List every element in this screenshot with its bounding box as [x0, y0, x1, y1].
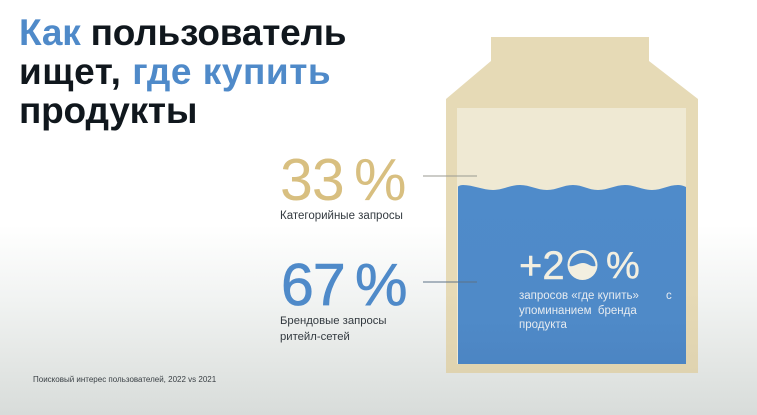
text: queries with brand mention: продукта — [519, 319, 567, 331]
title: продукты — [19, 90, 197, 131]
footnote: Поисковый интерес пользователей, 2022 vs 2021 — [33, 375, 216, 384]
title — [19, 12, 346, 131]
label: category queries: Категорийные запросы — [280, 210, 403, 222]
text: queries with brand mention: с — [666, 290, 672, 302]
stat: plus 20 percent: +2 — [519, 244, 565, 288]
label: brand queries — [280, 315, 387, 342]
jar inner — [457, 108, 686, 364]
stat: 33 percent: 33 % — [280, 147, 405, 213]
label: brand queries: Брендовые запросы — [280, 315, 387, 327]
icon: half-filled zero — [568, 250, 598, 280]
jar body — [446, 37, 698, 373]
text: queries with brand mention — [519, 290, 672, 331]
text: queries with brand mention: упоминанием бренда — [519, 304, 637, 316]
stat: percent sign: % — [606, 245, 640, 287]
water — [458, 185, 686, 364]
title: ищет, где купить — [19, 51, 331, 92]
text: queries with brand mention: запросов «где купить» — [519, 290, 639, 302]
label: brand queries: ритейл-сетей — [280, 330, 350, 342]
leader line: 33 percent — [423, 175, 477, 177]
title: Как пользователь — [19, 12, 346, 53]
stat: 67 percent: 67 % — [281, 252, 406, 318]
leader line: 67 percent — [423, 281, 477, 283]
